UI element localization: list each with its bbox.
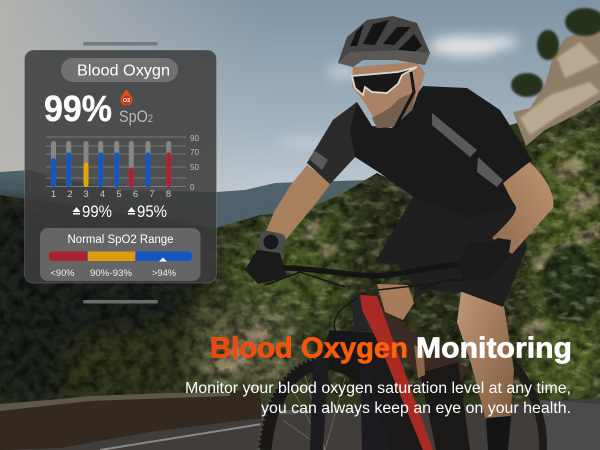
- heading pill: Blood Oxygn: [77, 62, 170, 80]
- scale labels: 0: [190, 183, 195, 192]
- rear wheel: [512, 362, 543, 450]
- panel: normal range: [40, 228, 200, 281]
- range labels: <90%: [50, 268, 75, 279]
- bar fills: [51, 152, 171, 187]
- title: [210, 332, 572, 364]
- jersey: [307, 86, 532, 218]
- foliage texture light: [74, 101, 600, 400]
- jersey stripes: [310, 113, 503, 187]
- sock: [486, 416, 511, 450]
- icon: oxygen drop: O2: [123, 98, 130, 104]
- scale labels: 90: [190, 134, 199, 143]
- bar numbers: 3: [83, 189, 89, 200]
- chin strap: [396, 72, 414, 126]
- fork crown: [322, 330, 385, 372]
- neck and face: [352, 62, 425, 128]
- rocky cliff: [513, 25, 600, 146]
- range labels: [50, 268, 177, 279]
- road: [0, 398, 600, 450]
- spokes: [283, 375, 345, 450]
- bar numbers: 5: [116, 189, 122, 200]
- description text: Monitor your blood oxygen saturation level at any time,: [185, 380, 571, 397]
- slope colour masses: [0, 120, 600, 400]
- bar numbers: 8: [166, 189, 171, 200]
- panel: blood oxygen card: [24, 50, 216, 283]
- fork legs: [310, 345, 392, 450]
- front wheel: [265, 363, 387, 450]
- bar tracks: [51, 141, 171, 187]
- right leg: [457, 285, 514, 420]
- description text: you can always keep an eye on your health.: [261, 400, 571, 417]
- wheel tread: [258, 357, 325, 450]
- helmet: [338, 16, 430, 67]
- red stripe: [360, 295, 433, 450]
- left arm: [265, 165, 331, 242]
- scale labels: 50: [190, 163, 199, 172]
- head tube: [352, 292, 380, 332]
- cyclist: [245, 16, 553, 450]
- sunglasses: [352, 67, 417, 95]
- left glove: [245, 250, 287, 284]
- peak and low readings: 95%: [137, 203, 167, 221]
- bar numbers: [51, 189, 171, 200]
- foliage texture dark: [0, 100, 600, 404]
- bar chart: [46, 134, 199, 200]
- peak and low readings: 99%: [82, 203, 112, 221]
- right road: [540, 400, 600, 450]
- bar numbers: 4: [100, 189, 105, 200]
- icon: oxygen drop: [120, 90, 132, 106]
- description text: [185, 380, 571, 417]
- bottom handle bar: [83, 300, 158, 304]
- pine trees: [511, 8, 600, 97]
- scale labels: [190, 134, 199, 192]
- range heading: Normal SpO2 Range: [68, 234, 174, 246]
- peak and low readings: [72, 203, 167, 221]
- right glove: [457, 238, 511, 280]
- right arm: [492, 160, 553, 254]
- rock and scree patches: [202, 154, 600, 374]
- top handle bar: [83, 42, 158, 46]
- bar numbers: 1: [51, 189, 56, 200]
- clouds: [279, 36, 518, 146]
- spo2 label: SpO2: [119, 107, 153, 126]
- bar numbers: 6: [133, 189, 138, 200]
- hillside: [0, 100, 600, 410]
- drivetrain: [420, 362, 470, 450]
- title: Blood Oxygen: [210, 332, 408, 364]
- scale labels: 70: [190, 148, 199, 157]
- jersey sleeve: [307, 102, 357, 184]
- bar numbers: 2: [67, 189, 73, 200]
- sky: [0, 0, 600, 230]
- handlebar: [283, 264, 460, 276]
- title: Monitoring: [416, 332, 572, 364]
- watch: [257, 230, 287, 254]
- big value: 99%: [44, 88, 112, 129]
- range labels: >94%: [152, 268, 177, 279]
- brake levers and cables: [265, 272, 468, 338]
- top tube: [377, 303, 468, 385]
- distant mountains: [0, 170, 372, 235]
- beard shadow: [372, 92, 416, 128]
- down tube: [368, 353, 423, 450]
- left leg: [377, 284, 414, 320]
- range bar: [49, 252, 192, 262]
- bar numbers: 7: [149, 189, 155, 200]
- stone wall: [0, 390, 262, 450]
- range labels: 90%-93%: [90, 268, 133, 279]
- bicycle: [258, 292, 543, 450]
- dark bush: [541, 245, 600, 325]
- heading pill: [61, 58, 178, 82]
- shorts: [375, 197, 527, 307]
